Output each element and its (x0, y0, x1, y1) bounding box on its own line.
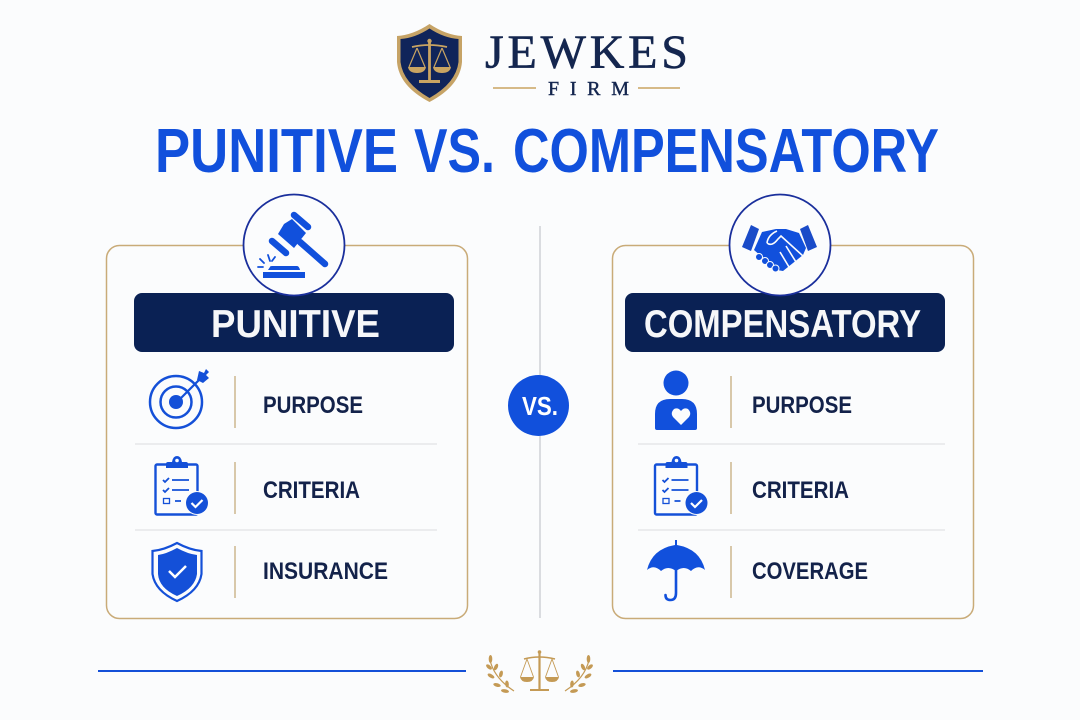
row: purpose (150, 369, 363, 428)
icon: gavel in circle (244, 194, 344, 296)
heading bar: compensatory (625, 293, 945, 352)
title (155, 117, 939, 186)
row: insurance (152, 543, 388, 601)
icon: target (150, 369, 209, 428)
icon: handshake in circle (730, 194, 830, 296)
title: PUNITIVE (155, 117, 398, 186)
icon: shield with check (152, 543, 202, 601)
footer: rule lines and scales emblem (98, 650, 983, 693)
row: criteria (655, 456, 849, 515)
icon: clipboard with check (156, 456, 209, 515)
icon: clipboard with check (655, 456, 708, 515)
label: PURPOSE (263, 392, 363, 419)
icon: logo shield with scales (397, 24, 462, 102)
panel: compensatory (612, 194, 974, 618)
label: CRITERIA (263, 477, 360, 504)
title: COMPENSATORY (513, 117, 939, 186)
row: criteria (156, 456, 360, 515)
row: purpose (655, 370, 852, 430)
center divider line (539, 226, 541, 618)
icon: right laurel (565, 655, 594, 693)
label: INSURANCE (263, 558, 388, 585)
icon: umbrella (647, 540, 705, 600)
logo wordmark: JEWKES (485, 26, 688, 79)
icon: person with heart (655, 370, 697, 430)
panel: punitive (106, 194, 468, 618)
heading bar: punitive (134, 293, 454, 352)
row: coverage (647, 540, 868, 600)
label: PURPOSE (752, 392, 852, 419)
vs badge: VS. (522, 391, 558, 421)
logo subtitle: FIRM (548, 78, 629, 100)
label: CRITERIA (752, 477, 849, 504)
title: VS. (414, 117, 495, 186)
label: COVERAGE (752, 558, 868, 585)
icon: left laurel (485, 655, 514, 693)
heading bar: compensatory: COMPENSATORY (644, 303, 921, 346)
vs badge (508, 375, 569, 436)
logo: Jewkes Firm (397, 24, 688, 102)
icon: footer scales (520, 650, 559, 691)
heading bar: punitive: PUNITIVE (211, 303, 380, 346)
